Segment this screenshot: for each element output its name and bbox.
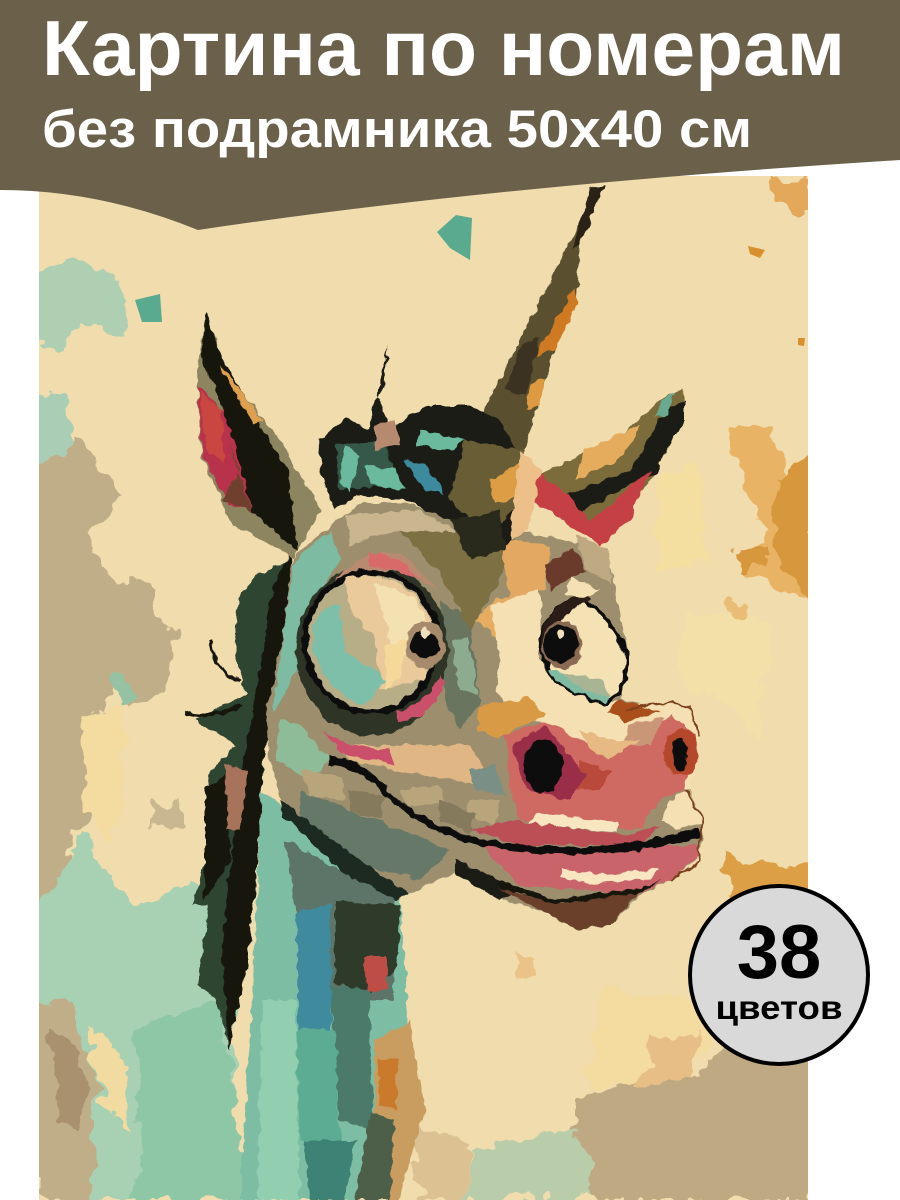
badge: colour count	[690, 886, 868, 1064]
subtitle: без подрамника 50х40 см	[42, 100, 752, 159]
snout outline	[625, 703, 705, 880]
teal blots	[135, 215, 472, 322]
top hair tuft	[318, 344, 540, 560]
unicorn horn	[465, 186, 604, 455]
nostrils	[512, 725, 698, 800]
upper lip highlight	[530, 814, 618, 832]
title: Картина по номерам	[42, 4, 845, 92]
banner	[0, 0, 900, 230]
texture dabs on cheek	[300, 770, 500, 825]
painting background	[39, 176, 808, 1200]
background washes	[30, 176, 815, 1200]
mouth	[328, 756, 700, 854]
badge label: цветов	[716, 989, 842, 1026]
right eye	[540, 535, 660, 722]
painting: unicorn on abstract background	[30, 176, 815, 1200]
neck	[240, 790, 425, 1200]
right ear	[532, 389, 684, 546]
lower lip	[480, 845, 700, 895]
cream muzzle	[490, 590, 700, 790]
big left eye	[296, 552, 448, 736]
left ear	[197, 312, 322, 557]
pink snout	[505, 715, 695, 830]
face	[266, 503, 705, 930]
small orange dots	[748, 246, 805, 346]
mane: left	[184, 552, 296, 1050]
badge number: 38	[737, 910, 821, 995]
